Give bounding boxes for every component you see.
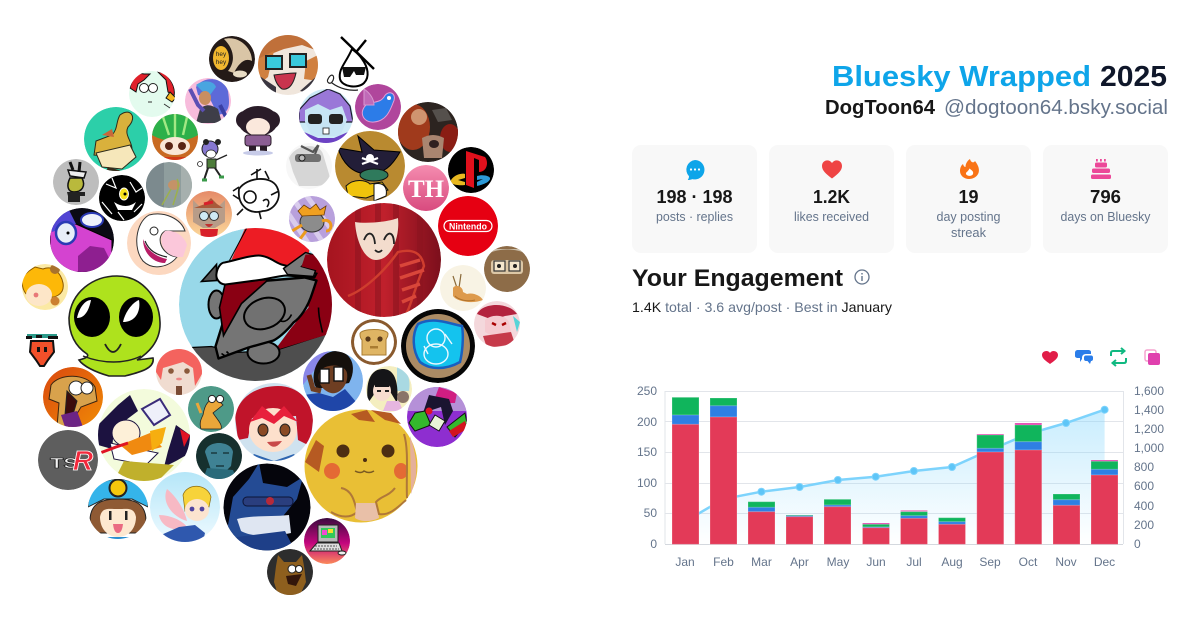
stat card: likes received [769, 145, 894, 253]
avatar: afro character [236, 106, 280, 156]
month labels: Dec [1094, 555, 1115, 569]
avatar: sunglasses doodle [327, 37, 374, 90]
month labels: Nov [1055, 555, 1077, 569]
avatar: grey photo with green figure [146, 162, 192, 208]
avatar: green melon [152, 113, 198, 161]
bar: Feb [710, 398, 737, 544]
bar: Sep [977, 434, 1004, 544]
stat card: day posting streak: streak [951, 225, 986, 240]
avatar: grey penguin [53, 159, 99, 205]
engagement chart [637, 384, 1164, 569]
avatar: hey hey duck [209, 36, 255, 82]
chart gridlines and axes [665, 391, 1124, 544]
stat card: days on Bluesky [1043, 145, 1168, 253]
bar: Nov [1053, 494, 1080, 544]
month labels: Aug [941, 555, 963, 569]
bar: Aug [938, 518, 966, 544]
left axis labels: 100 [637, 476, 657, 490]
avatar: dark teal portrait [196, 433, 242, 480]
avatar: bearded glasses man [484, 246, 530, 292]
month labels [675, 555, 1115, 569]
avatar: hey hey duck: hey [216, 51, 227, 58]
month labels: Apr [790, 555, 809, 569]
avatar: garden slug [440, 265, 486, 311]
stat card: day posting streak [906, 145, 1031, 253]
bar: Jul [900, 510, 928, 544]
stat card: likes received: likes received [794, 209, 869, 224]
avatar: TH logo: TH [408, 176, 445, 203]
bar: Mar [748, 502, 775, 544]
stat card: day posting streak: 19 [958, 187, 978, 207]
avatar: crimson creature [474, 301, 520, 348]
avatar: brown dog [267, 549, 313, 595]
month labels: Sep [979, 555, 1001, 569]
left axis labels: 250 [637, 384, 657, 398]
month labels: Jul [906, 555, 922, 569]
bar: Oct [1015, 423, 1042, 544]
bar: May [824, 499, 851, 544]
right axis labels: 0 [1134, 537, 1141, 551]
avatar: TH logo [403, 165, 449, 211]
right axis labels: 200 [1134, 518, 1154, 532]
avatar: pirate duck [335, 131, 405, 201]
avatar: blue jelly toast [401, 309, 475, 383]
avatar: small purple-haired runner [198, 139, 227, 180]
bar: Jun [862, 523, 890, 544]
avatar: red dog photo [396, 102, 460, 162]
avatar: grinning moon [127, 211, 191, 275]
right axis labels [1134, 384, 1164, 551]
avatar: black skeleton [99, 175, 145, 221]
avatar: grey wolf sketch [289, 144, 330, 186]
cumulative area [685, 410, 1105, 544]
avatar: fish king [288, 195, 335, 243]
avatar: main grey creature in santa hat [176, 224, 336, 384]
avatar: fox with hat [186, 191, 232, 237]
avatar: blue fairy [150, 472, 220, 542]
month labels: Oct [1019, 555, 1038, 569]
icon: info [855, 270, 869, 284]
stat card: likes received: 1.2K [813, 187, 850, 207]
left axis labels: 50 [644, 506, 657, 520]
avatar: yellow fox girl [22, 264, 68, 310]
stat card: posts and replies: 198 · 198 [656, 187, 732, 207]
month labels: May [827, 555, 849, 569]
avatar: red horns ghost [129, 71, 176, 117]
stat card: day posting streak: day posting [936, 209, 1000, 224]
right axis labels: 600 [1134, 479, 1154, 493]
icon: cake [1091, 159, 1111, 179]
avatar: orange screaming character [43, 367, 103, 427]
avatar: red-haired anime girl [235, 383, 313, 461]
avatar: brown kid in hoodie [303, 351, 363, 411]
stat card: posts and replies: posts · replies [656, 209, 733, 224]
avatar: hey hey duck: hey [216, 59, 227, 66]
month labels: Mar [751, 555, 772, 569]
avatar: teal duck [84, 107, 148, 173]
month labels: Jan [675, 555, 695, 569]
icon: legend heart [1042, 351, 1058, 364]
icon: legend replies [1075, 350, 1093, 364]
avatar: orange slug on teal [188, 386, 234, 432]
title: Bluesky Wrapped [832, 61, 1091, 93]
avatar cluster [22, 35, 530, 595]
right axis labels: 1,000 [1134, 441, 1164, 455]
profile name and handle: DogToon64 [825, 97, 936, 119]
avatar: purple nerd [299, 89, 353, 143]
avatar: TSR logo: TS [50, 455, 78, 472]
left axis labels: 200 [637, 415, 657, 429]
engagement summary: 1.4K total · 3.6 avg/post · Best in January [632, 299, 892, 315]
avatar: pixel strawberry [26, 334, 58, 366]
avatar: red curtain mask [327, 202, 441, 317]
avatar: blue wolf [224, 463, 310, 551]
avatar: TSR logo [38, 430, 98, 490]
avatar: spiky figure with clock [98, 389, 190, 481]
stacked bars [672, 397, 1118, 544]
right axis labels: 1,400 [1134, 403, 1164, 417]
right axis labels: 1,600 [1134, 384, 1164, 398]
cumulative line [685, 406, 1108, 522]
bar: Jan [672, 397, 699, 544]
avatar: blue bird on purple [355, 84, 401, 130]
icon: legend repost [1111, 348, 1126, 366]
right axis labels: 1,200 [1134, 422, 1164, 436]
avatar: blue hair woman [185, 78, 231, 124]
stat card: posts and replies [632, 145, 757, 253]
icon: chat bubble [686, 160, 704, 180]
avatar: PlayStation logo [448, 147, 494, 193]
left axis labels: 0 [650, 537, 657, 551]
month labels: Jun [866, 555, 886, 569]
bar: Apr [786, 515, 813, 544]
stat card: days on Bluesky: days on Bluesky [1060, 209, 1151, 224]
avatar: retro computer [304, 518, 350, 564]
icon: heart [822, 160, 842, 178]
avatar: purple gem creature [50, 208, 114, 272]
right axis labels: 400 [1134, 499, 1154, 513]
avatar: sketch doodle [233, 169, 279, 219]
avatar: Nintendo logo: Nintendo [449, 222, 487, 232]
avatar: Pikachu [304, 410, 418, 522]
icon: legend quotes [1145, 350, 1160, 365]
left axis labels: 150 [637, 445, 657, 459]
avatar: toast badge [351, 319, 397, 365]
avatar: TSR logo: R [73, 445, 94, 476]
avatar: green alien [69, 276, 160, 376]
avatar: green spiky brawler [407, 387, 467, 447]
stat card: days on Bluesky: 796 [1090, 187, 1121, 207]
avatar: pink-haired chibi [156, 348, 202, 396]
title: 2025 [1100, 61, 1167, 93]
right axis labels: 800 [1134, 460, 1154, 474]
avatar: Nintendo logo [438, 196, 498, 256]
chart legend icons [1042, 348, 1160, 366]
avatar: black-haired girl [366, 366, 412, 412]
bar: Dec [1091, 460, 1118, 544]
month labels: Feb [713, 555, 734, 569]
icon: flame [960, 159, 979, 179]
avatar: glasses cat [258, 35, 318, 95]
avatar: blue cap boy [88, 479, 148, 539]
heading: Your Engagement: Your Engagement [632, 265, 843, 292]
left axis labels [637, 384, 657, 551]
profile name and handle: @dogtoon64.bsky.social [944, 97, 1168, 119]
profile name and handle [825, 97, 1168, 119]
